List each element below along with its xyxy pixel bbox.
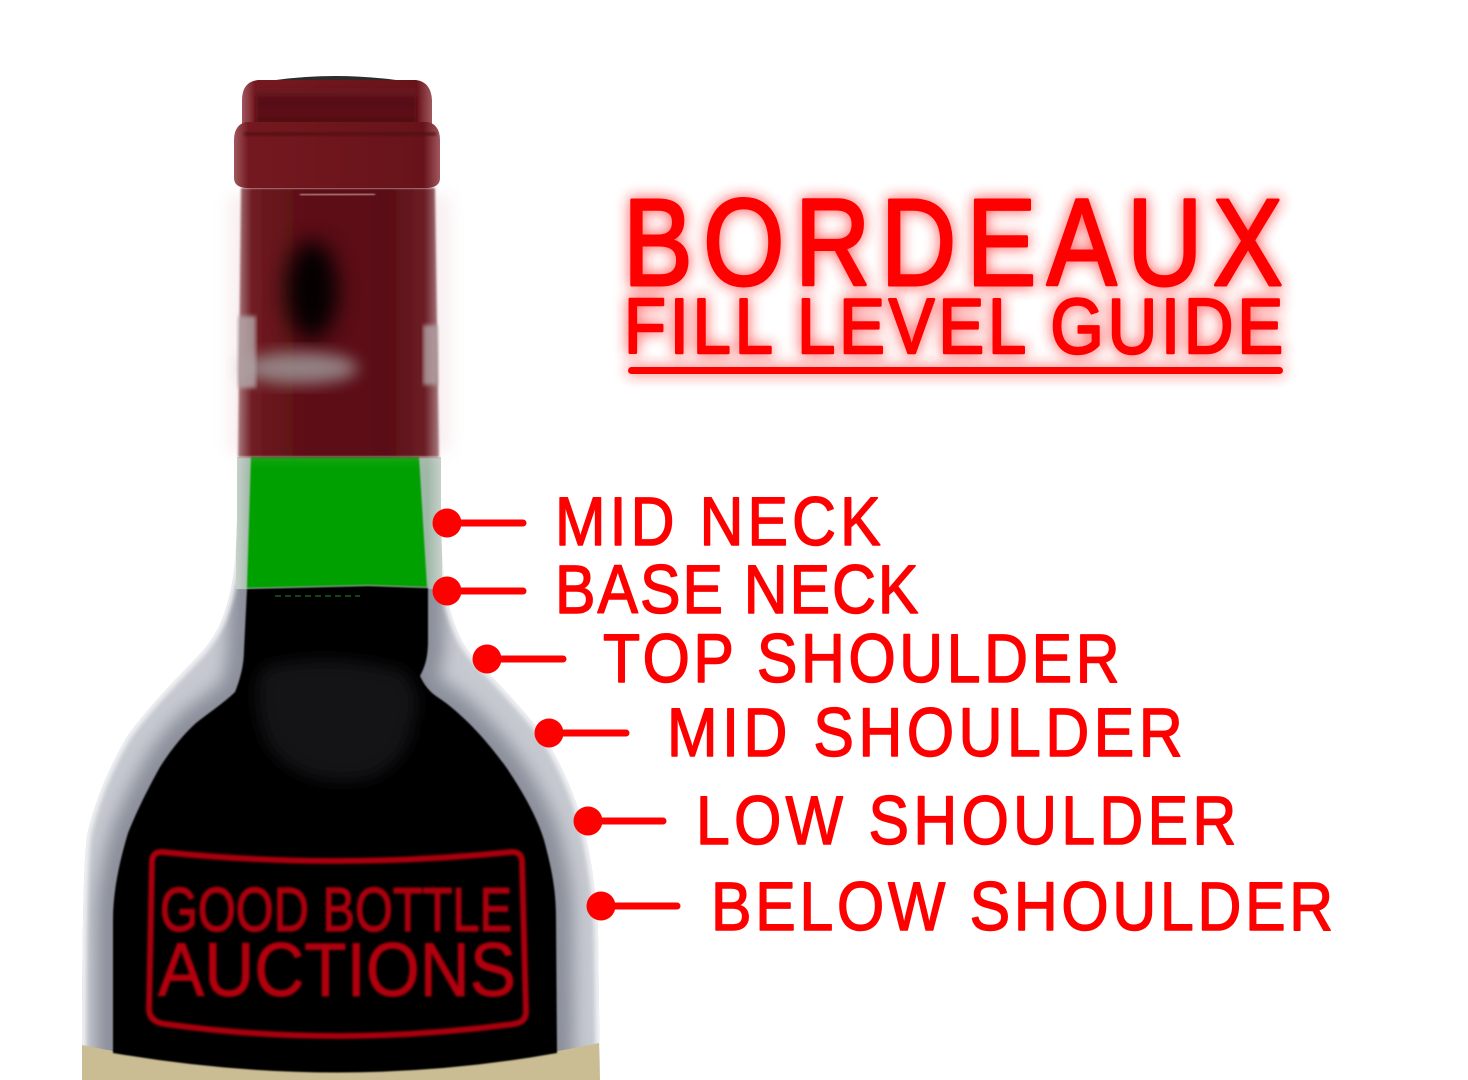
bottle [70, 76, 610, 1080]
title [623, 175, 1283, 374]
logo frame [149, 852, 526, 1036]
red logo on bottle: AUCTIONS [158, 928, 516, 1013]
dark wine fill [113, 586, 557, 1072]
level: mid neck: MID NECK [555, 482, 881, 560]
subheading: fill level guide: FILL LEVEL GUIDE [624, 282, 1283, 370]
logo text: GOOD BOTTLE [160, 876, 512, 945]
title glow [623, 175, 1283, 374]
title glow: BORDEAUX [623, 175, 1283, 312]
tan paper label [82, 1043, 600, 1080]
capsule band [234, 122, 440, 188]
cork seal [276, 76, 396, 80]
reflection on wine [257, 660, 417, 781]
level: mid shoulder: MID SHOULDER [667, 693, 1183, 771]
title glow: FILL LEVEL GUIDE [624, 282, 1283, 370]
blurred capsule neck [228, 188, 450, 457]
level: base neck: BASE NECK [555, 550, 918, 628]
green sediment line [275, 595, 360, 597]
title underline [628, 367, 1283, 374]
level: top shoulder: TOP SHOULDER [603, 619, 1120, 697]
capsule top section [242, 80, 432, 124]
bottle body glass [70, 450, 610, 1080]
level: low shoulder: LOW SHOULDER [696, 781, 1236, 859]
green glass above fill line [247, 457, 427, 588]
level: below shoulder: BELOW SHOULDER [711, 867, 1333, 945]
heading: Bordeaux: BORDEAUX [623, 175, 1283, 312]
red logo on bottle [149, 852, 526, 1036]
